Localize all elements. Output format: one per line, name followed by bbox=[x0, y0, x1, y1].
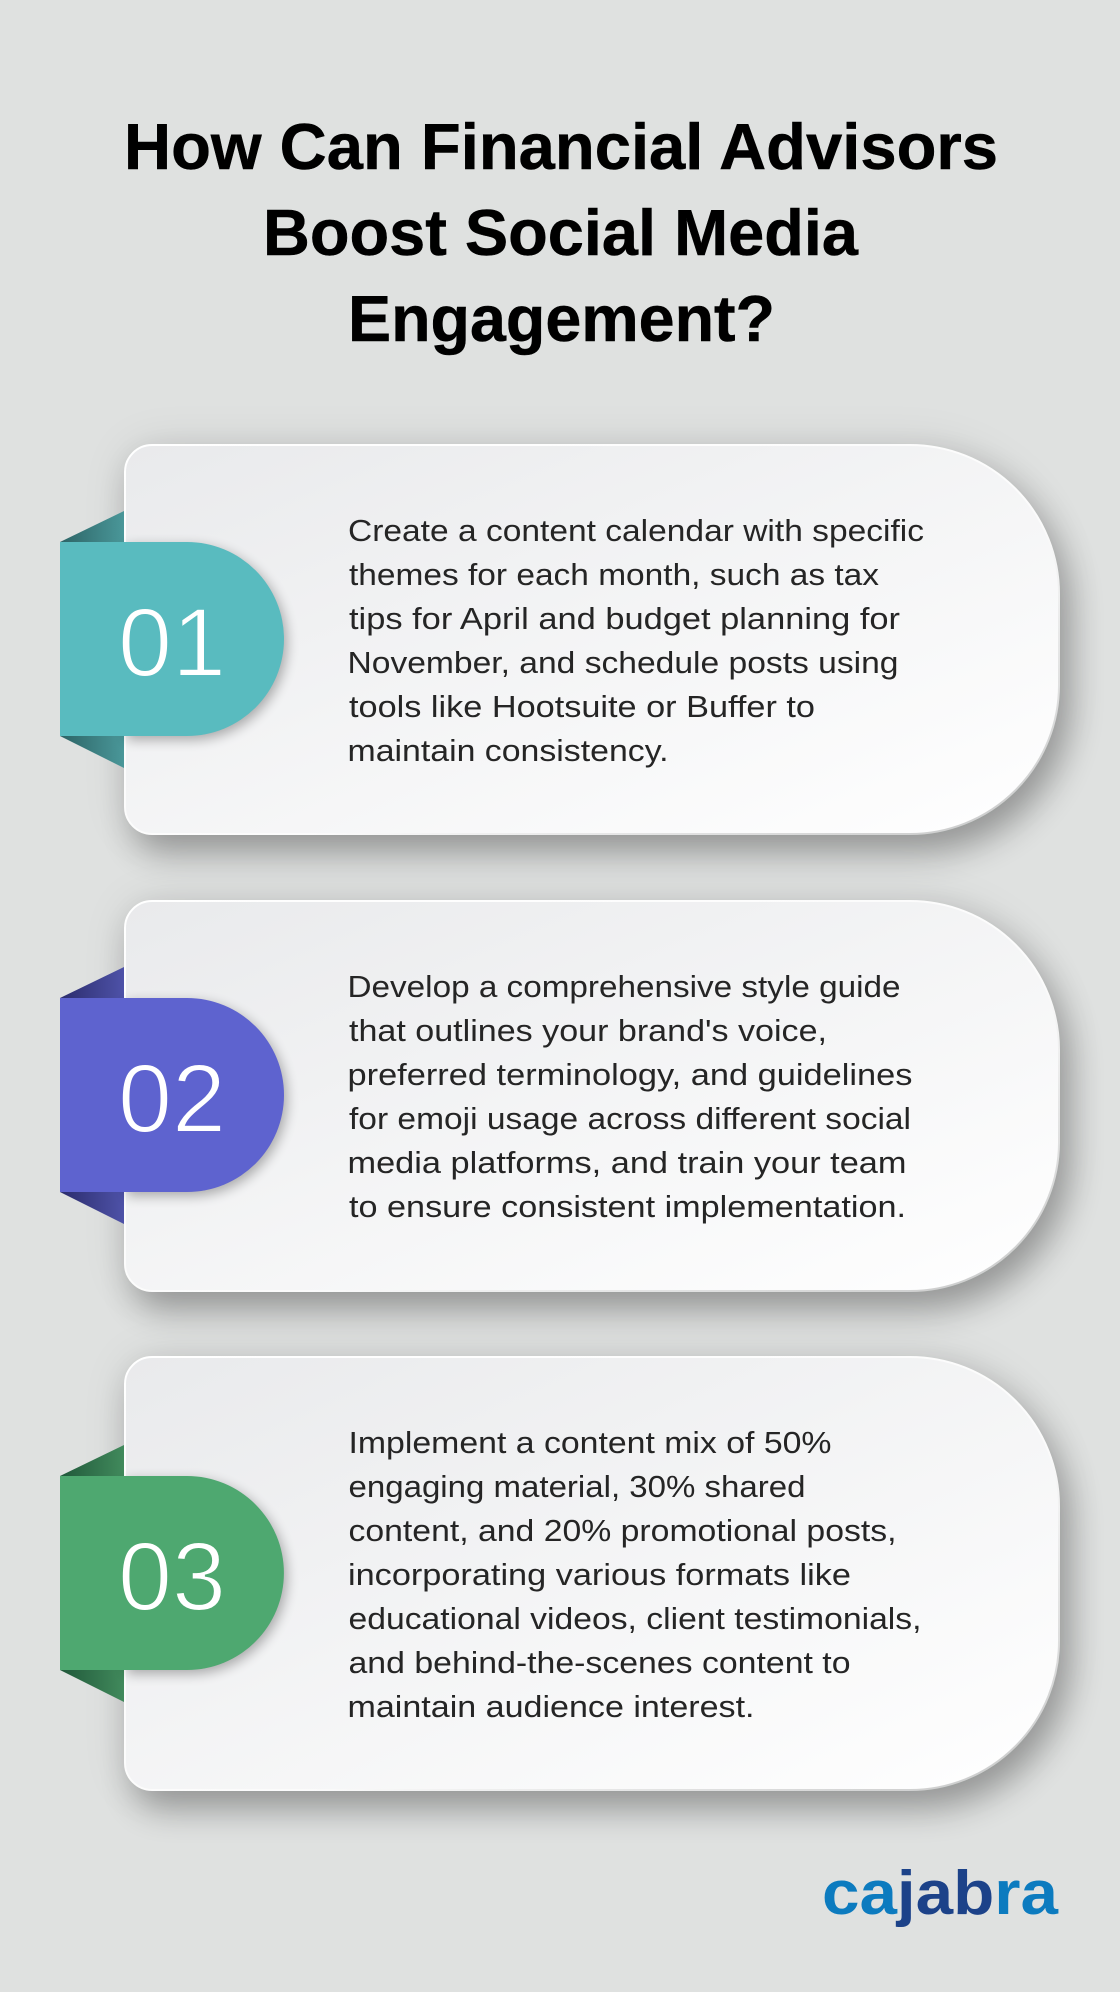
body text bbox=[348, 513, 924, 768]
title: Engagement? bbox=[348, 282, 775, 355]
body text: tools like Hootsuite or Buffer to bbox=[349, 689, 815, 724]
body text: themes for each month, such as tax bbox=[349, 557, 880, 592]
title: How Can Financial Advisors bbox=[124, 110, 998, 183]
card background bbox=[125, 445, 1059, 834]
ribbon fold bottom bbox=[60, 1192, 124, 1224]
body text: for emoji usage across different social bbox=[349, 1101, 911, 1136]
panel: step 03 bbox=[60, 1356, 1070, 1809]
card background bbox=[125, 1357, 1059, 1790]
body text: to ensure consistent implementation. bbox=[349, 1189, 906, 1224]
body text: content, and 20% promotional posts, bbox=[348, 1513, 896, 1548]
ribbon fold top bbox=[60, 511, 124, 542]
ribbon fold top bbox=[60, 1445, 124, 1476]
panel: step 01 bbox=[60, 444, 1070, 853]
body text: maintain audience interest. bbox=[348, 1689, 754, 1724]
body text: that outlines your brand's voice, bbox=[349, 1013, 827, 1048]
body text: maintain consistency. bbox=[348, 733, 668, 768]
number tab bbox=[60, 998, 284, 1192]
title bbox=[124, 110, 998, 355]
body text bbox=[348, 1425, 922, 1724]
ribbon fold bottom bbox=[60, 736, 124, 768]
body text: November, and schedule posts using bbox=[348, 645, 898, 680]
number tab bbox=[60, 542, 284, 736]
body text: preferred terminology, and guidelines bbox=[348, 1057, 912, 1092]
body text: and behind-the-scenes content to bbox=[348, 1645, 850, 1680]
number 02: 02 bbox=[118, 1044, 226, 1153]
number 03: 03 bbox=[118, 1522, 226, 1631]
body text: Create a content calendar with specific bbox=[348, 513, 924, 548]
body text: tips for April and budget planning for bbox=[349, 601, 900, 636]
body text: engaging material, 30% shared bbox=[348, 1469, 806, 1504]
ribbon fold bottom bbox=[60, 1670, 124, 1702]
number tab bbox=[60, 1476, 284, 1670]
title: Boost Social Media bbox=[263, 196, 859, 269]
number 01: 01 bbox=[118, 588, 226, 697]
panel: step 02 bbox=[60, 900, 1070, 1310]
body text bbox=[348, 969, 912, 1224]
body text: educational videos, client testimonials, bbox=[348, 1601, 922, 1636]
body text: Implement a content mix of 50% bbox=[348, 1425, 832, 1460]
card background bbox=[125, 901, 1059, 1291]
body text: media platforms, and train your team bbox=[348, 1145, 906, 1180]
body text: Develop a comprehensive style guide bbox=[348, 969, 900, 1004]
ribbon fold top bbox=[60, 967, 124, 998]
body text: incorporating various formats like bbox=[348, 1557, 851, 1592]
logo: cajabra: cajabra bbox=[822, 1859, 1059, 1928]
